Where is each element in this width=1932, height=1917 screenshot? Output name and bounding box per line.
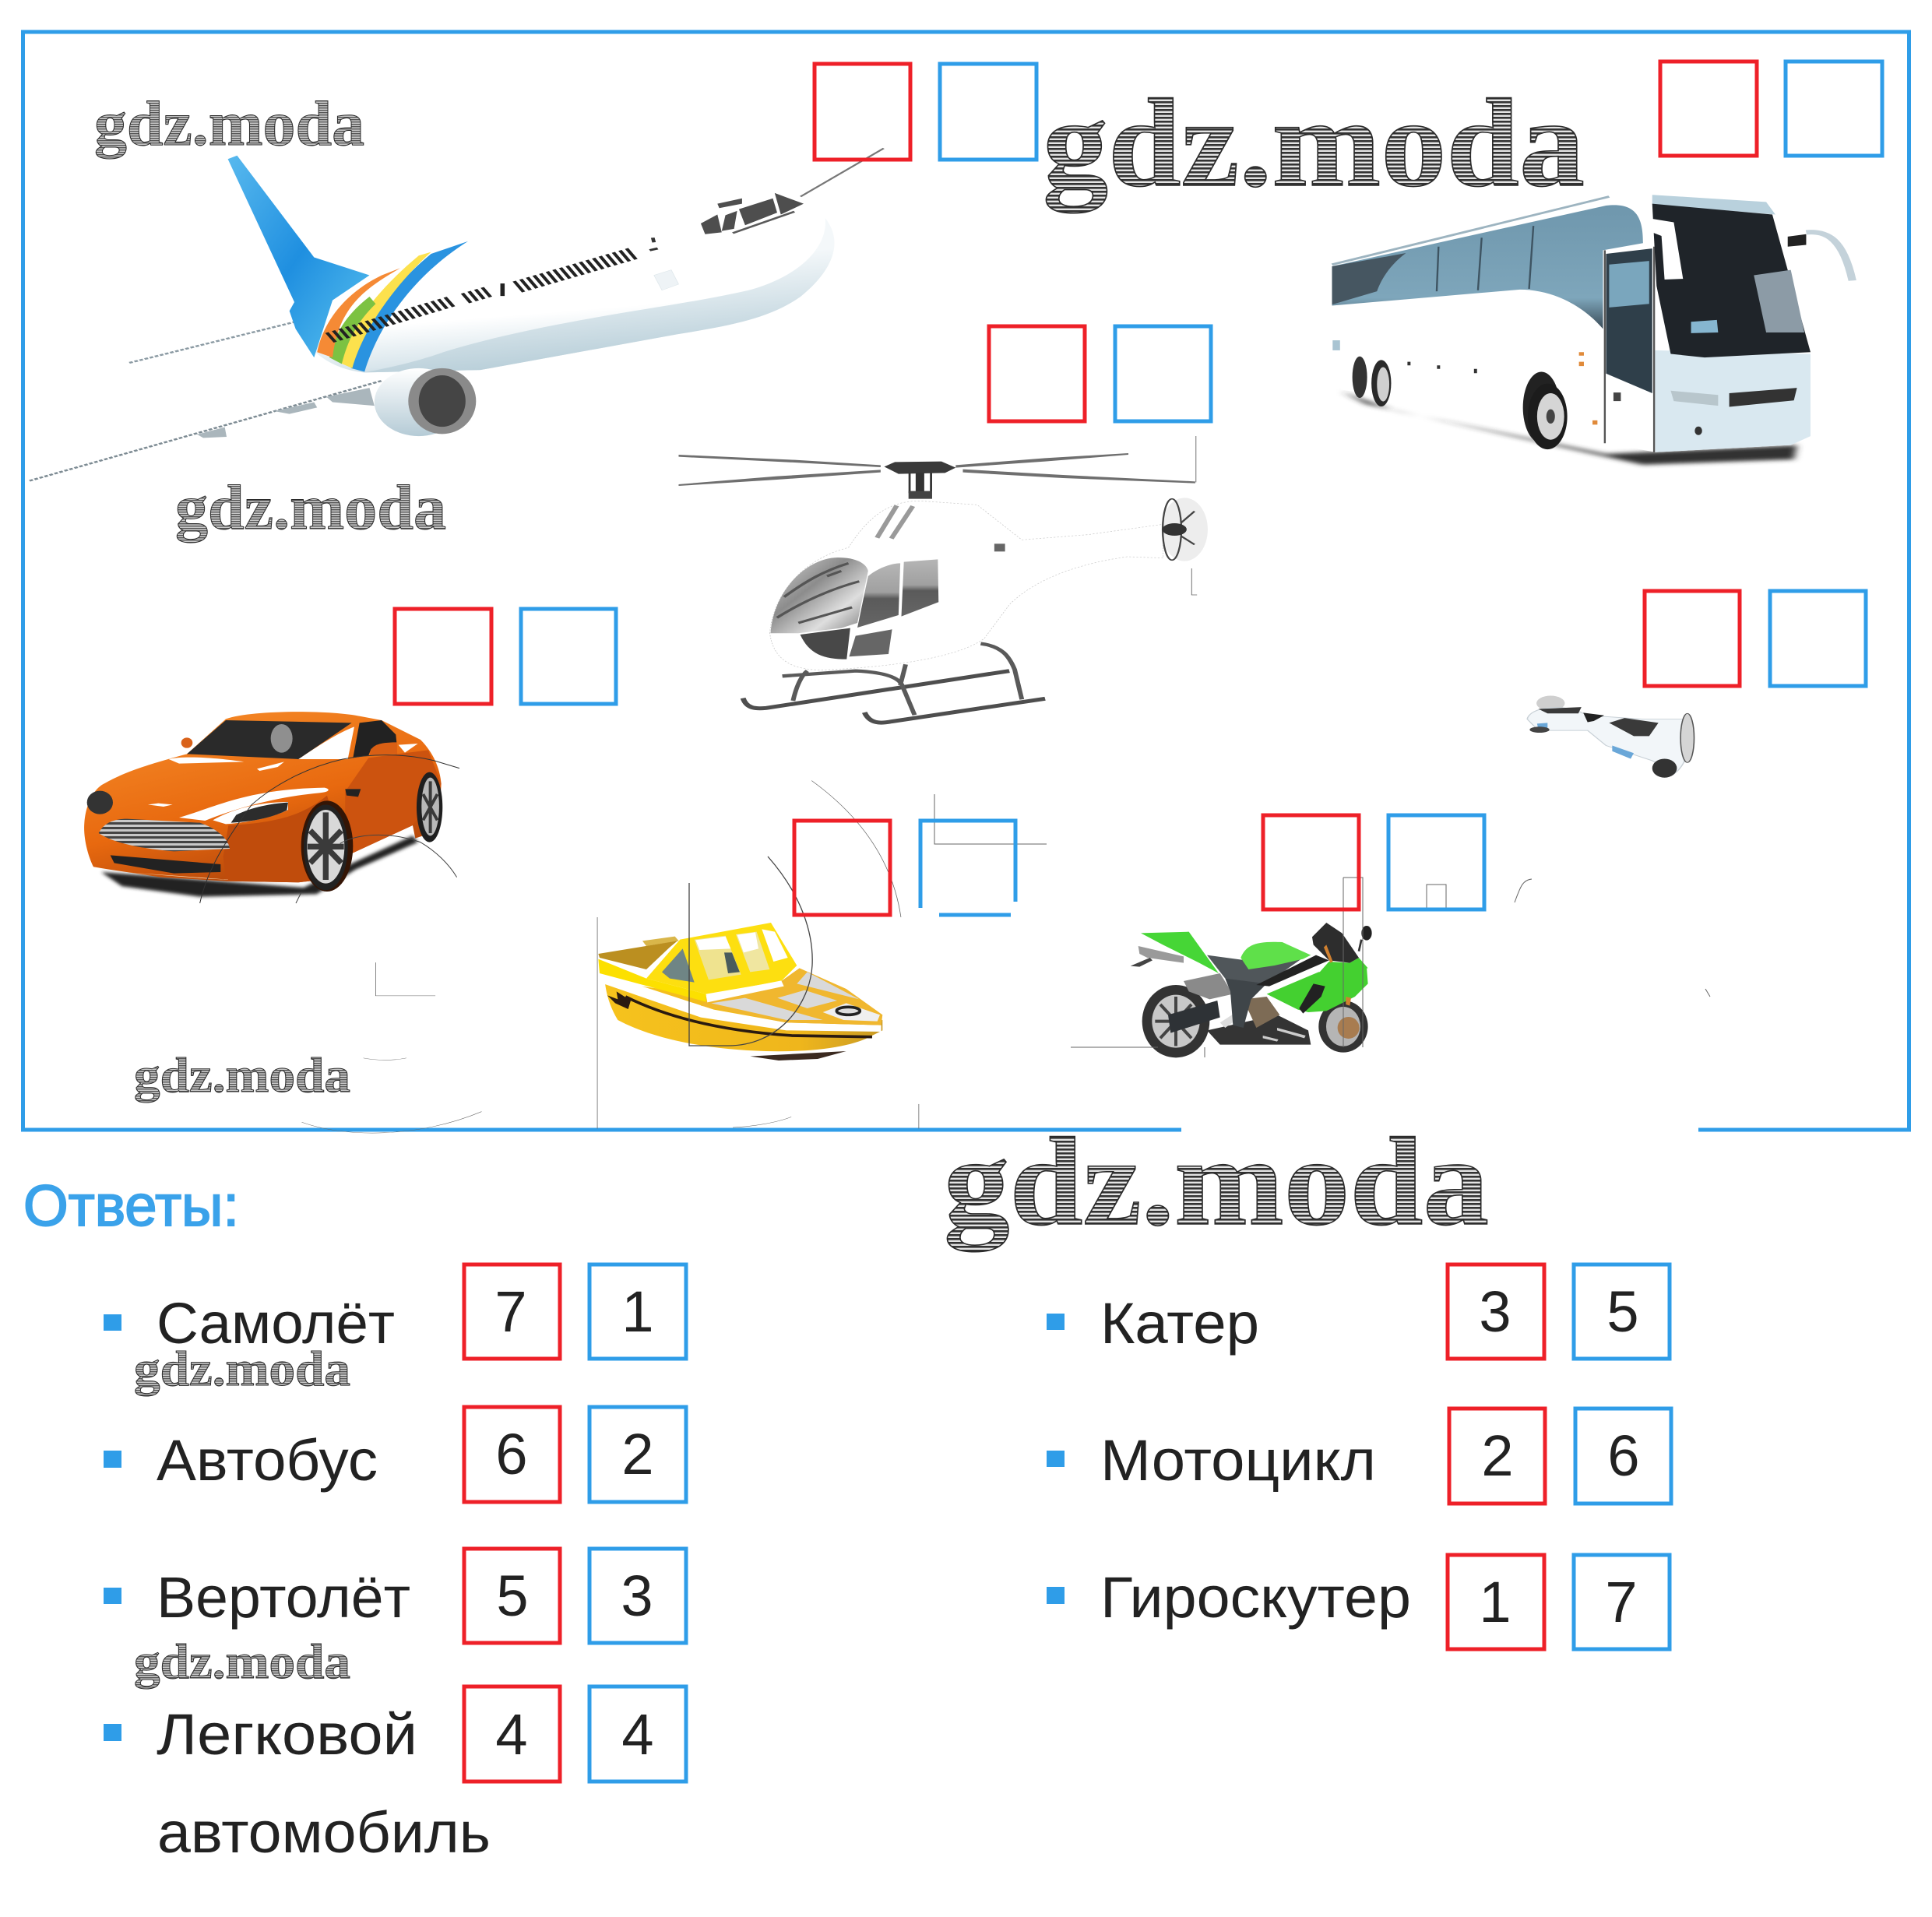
answer row: hoverboard: 1 — [1479, 1570, 1511, 1634]
empty boxes: hoverboard — [1645, 591, 1866, 686]
answer row: motorcycle: 2 — [1481, 1423, 1514, 1488]
answer row: airplane — [104, 1265, 686, 1359]
watermark large lower: gdz.moda — [944, 1113, 1489, 1252]
motorcycle overlay lines — [934, 794, 1710, 1057]
answer row: boat: 3 — [1479, 1279, 1511, 1344]
answer row: hoverboard: 7 — [1605, 1570, 1638, 1634]
watermark: gdz.moda — [134, 1634, 350, 1689]
vehicle: airplane — [30, 149, 884, 480]
answer row: boat: 5 — [1606, 1279, 1639, 1344]
answers: right column — [1047, 1265, 1671, 1649]
answer row: helicopter: Вертолёт — [157, 1565, 410, 1630]
vehicle: boat — [598, 923, 882, 1061]
answer row: airplane: Самолёт — [157, 1291, 395, 1356]
answer row: car — [104, 1687, 686, 1865]
answer row: bus — [104, 1407, 686, 1502]
answer row: boat — [1047, 1265, 1670, 1359]
answer row: car: автомобиль — [157, 1800, 491, 1865]
empty boxes: boat — [794, 821, 1015, 915]
vehicle: hoverboard — [1527, 696, 1694, 778]
heading: answers: Ответы: — [23, 1173, 239, 1238]
empty boxes: bus — [1660, 62, 1882, 156]
panel: pictures frame — [23, 32, 1909, 1130]
answer row: bus: 6 — [495, 1422, 528, 1486]
empty boxes: motorcycle — [1263, 815, 1484, 909]
answer row: airplane: 7 — [494, 1279, 527, 1344]
answer row: motorcycle: 6 — [1607, 1423, 1640, 1488]
answer row: airplane: 1 — [621, 1279, 654, 1344]
watermark large top: gdz.moda — [1043, 74, 1585, 213]
answer row: boat: Катер — [1100, 1291, 1259, 1356]
boat overlay arc — [689, 856, 812, 1046]
vehicle: helicopter — [678, 436, 1208, 723]
answer row: car: Легковой — [157, 1702, 417, 1767]
empty boxes: airplane — [815, 64, 1036, 160]
answer row: car: 4 — [495, 1702, 528, 1767]
empty boxes: car — [395, 609, 616, 704]
answer row: car: 4 — [621, 1702, 654, 1767]
answer row: helicopter: 5 — [496, 1563, 529, 1628]
vehicle: bus — [1330, 193, 1853, 465]
answer row: bus: Автобус — [157, 1428, 378, 1493]
faint construction lines around car and boat — [301, 781, 919, 1133]
empty boxes: helicopter — [989, 326, 1211, 421]
watermark: gdz.moda — [94, 88, 364, 159]
answer row: hoverboard: Гироскутер — [1100, 1565, 1411, 1630]
answer row: hoverboard — [1047, 1555, 1670, 1649]
answer row: helicopter — [104, 1549, 686, 1643]
answer row: motorcycle: Мотоцикл — [1100, 1428, 1376, 1493]
watermark bottom of frame: gdz.moda — [134, 1047, 350, 1103]
answer row: bus: 2 — [621, 1422, 654, 1486]
watermark: gdz.moda — [175, 472, 446, 543]
answer row: motorcycle — [1047, 1409, 1671, 1504]
answers: left column — [104, 1265, 686, 1865]
vehicle: motorcycle — [1131, 923, 1372, 1057]
vehicle: car — [84, 712, 459, 903]
watermark: gdz.moda — [134, 1341, 350, 1396]
answer row: helicopter: 3 — [621, 1563, 653, 1628]
